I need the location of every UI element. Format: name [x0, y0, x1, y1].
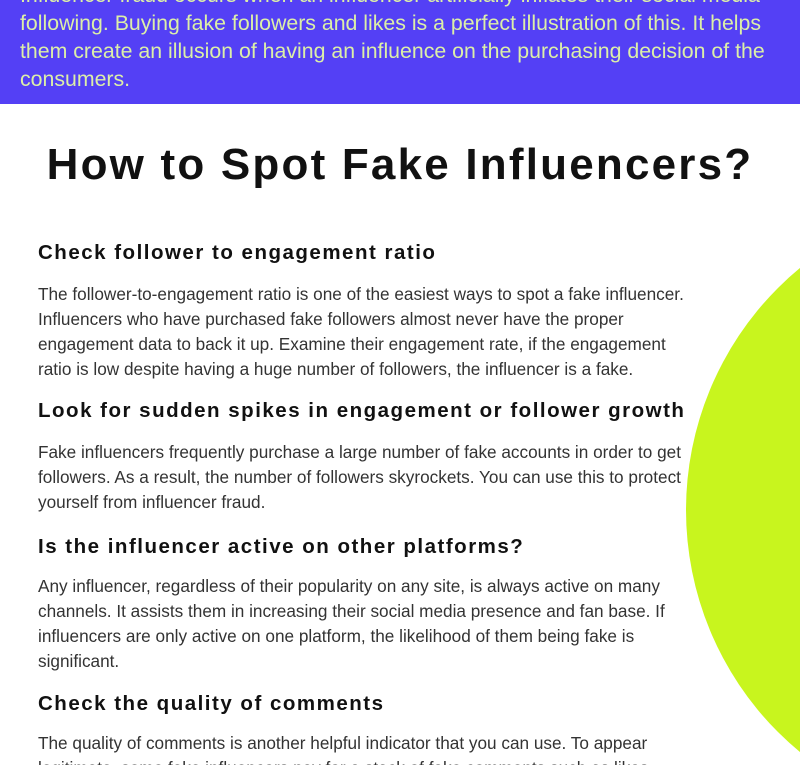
text 1: engagement data to back it up. Examine their engagement rate, if the engagement: [38, 334, 666, 354]
banner: intro: them create an illusion of having an influence on the purchasing decision of the: [20, 39, 765, 63]
banner: intro: [0, 0, 800, 104]
text 1: ratio is low despite having a huge number of followers, the influencer is a fake.: [38, 359, 633, 379]
banner: intro: consumers.: [20, 67, 130, 91]
text 4: The quality of comments is another helpful indicator that you can use. To appear: [38, 733, 647, 753]
text 2: Fake influencers frequently purchase a large number of fake accounts in order to get: [38, 442, 681, 462]
text 3: Any influencer, regardless of their popularity on any site, is always active on many: [38, 576, 660, 596]
heading 4: Check the quality of comments: [38, 692, 385, 715]
banner: intro: following. Buying fake followers and likes is a perfect illustration of this. It helps: [20, 11, 761, 35]
heading 2: Look for sudden spikes in engagement or follower growth: [38, 399, 685, 422]
text 1: Influencers who have purchased fake followers almost never have the proper: [38, 309, 624, 329]
text 3: significant.: [38, 651, 119, 671]
text 4: [38, 733, 648, 765]
heading 3: Is the influencer active on other platforms?: [38, 535, 524, 558]
text 1: The follower-to-engagement ratio is one of the easiest ways to spot a fake influencer.: [38, 284, 684, 304]
decorative circle: [686, 196, 800, 765]
heading 1: Check follower to engagement ratio: [38, 241, 436, 264]
title: How to Spot Fake Influencers?: [47, 140, 753, 189]
text 2: [38, 442, 681, 512]
text 3: [38, 576, 665, 671]
text 2: yourself from influencer fraud.: [38, 492, 265, 512]
text 1: [38, 284, 684, 379]
text 3: channels. It assists them in increasing their social media presence and fan base. If: [38, 601, 665, 621]
text 2: followers. As a result, the number of followers skyrockets. You can use this to protect: [38, 467, 681, 487]
text 3: influencers are only active on one platform, the likelihood of them being fake is: [38, 626, 634, 646]
